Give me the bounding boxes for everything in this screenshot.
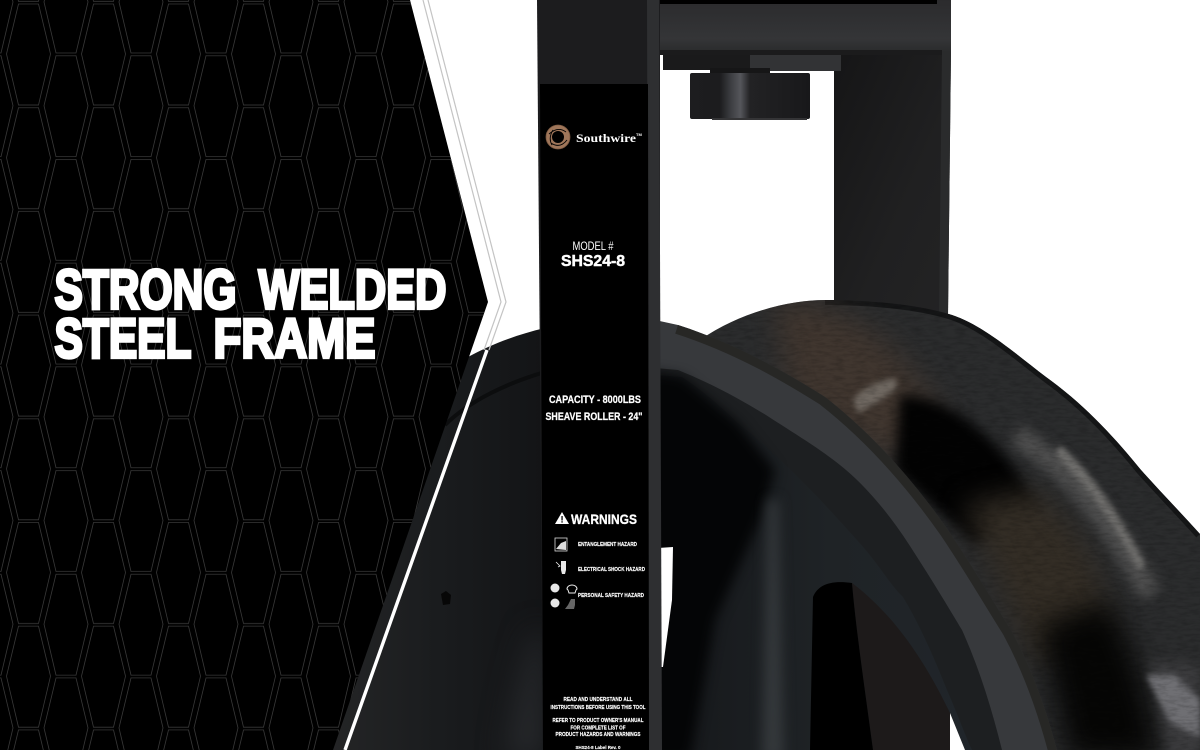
rim dark band [655,368,1002,750]
top cross beam [652,0,951,55]
left side of wheel [330,328,545,750]
capacity specs: SHEAVE ROLLER - 24" [546,411,642,423]
chevron outlines [345,0,506,750]
icon: entanglement hazard [555,538,567,551]
black opening [810,582,873,750]
Southwire logo: Southwire [576,131,637,145]
white gap beside column [658,547,673,667]
label instructions [550,697,646,750]
right frame column [834,50,951,315]
label instructions: FOR COMPLETE LIST OF [570,726,626,732]
title: FRAME [214,306,376,370]
bracket and roller [663,55,841,120]
warnings heading: WARNINGS [571,511,637,527]
hazard labels: PERSONAL SAFETY HAZARD [578,593,644,599]
model number: SHS24-8 [561,253,625,270]
icon: electrical shock hazard [556,561,566,574]
rear wheel [690,290,1200,750]
label instructions: REFER TO PRODUCT OWNER'S MANUAL [552,718,644,724]
hazard labels: ELECTRICAL SHOCK HAZARD [578,567,645,573]
Southwire logo [546,125,642,149]
model number [561,239,625,270]
title: STRONG [54,258,236,320]
label instructions: SHS24-8 Label Rev. 0 [576,745,621,750]
hazard labels [578,542,645,599]
label instructions: PRODUCT HAZARDS AND WARNINGS [556,732,641,738]
black hexagon panel [0,0,500,750]
spoke highlight [762,500,784,750]
shadow above spoke [650,372,775,750]
front wheel rim [650,320,1057,750]
Southwire logo: TM [636,132,642,137]
model number: MODEL # [572,239,614,253]
label instructions: INSTRUCTIONS BEFORE USING THIS TOOL [550,705,646,711]
title: WELDED [258,258,446,320]
title: STEEL [54,306,192,370]
left frame column with label [537,0,662,750]
rear wheel outer edge [825,300,1200,534]
icons: personal safety hazard [550,584,577,609]
white gap at bottom of wheel opening [950,713,965,750]
hazard labels: ENTANGLEMENT HAZARD [578,542,637,548]
capacity specs: CAPACITY - 8000LBS [549,394,641,406]
rim outer bevel [678,325,1057,750]
frame seen through wheel opening [852,583,965,750]
label instructions: READ AND UNDERSTAND ALL [564,697,632,703]
wheel hub face [655,375,972,750]
title [54,258,446,370]
capacity specs [546,394,642,423]
